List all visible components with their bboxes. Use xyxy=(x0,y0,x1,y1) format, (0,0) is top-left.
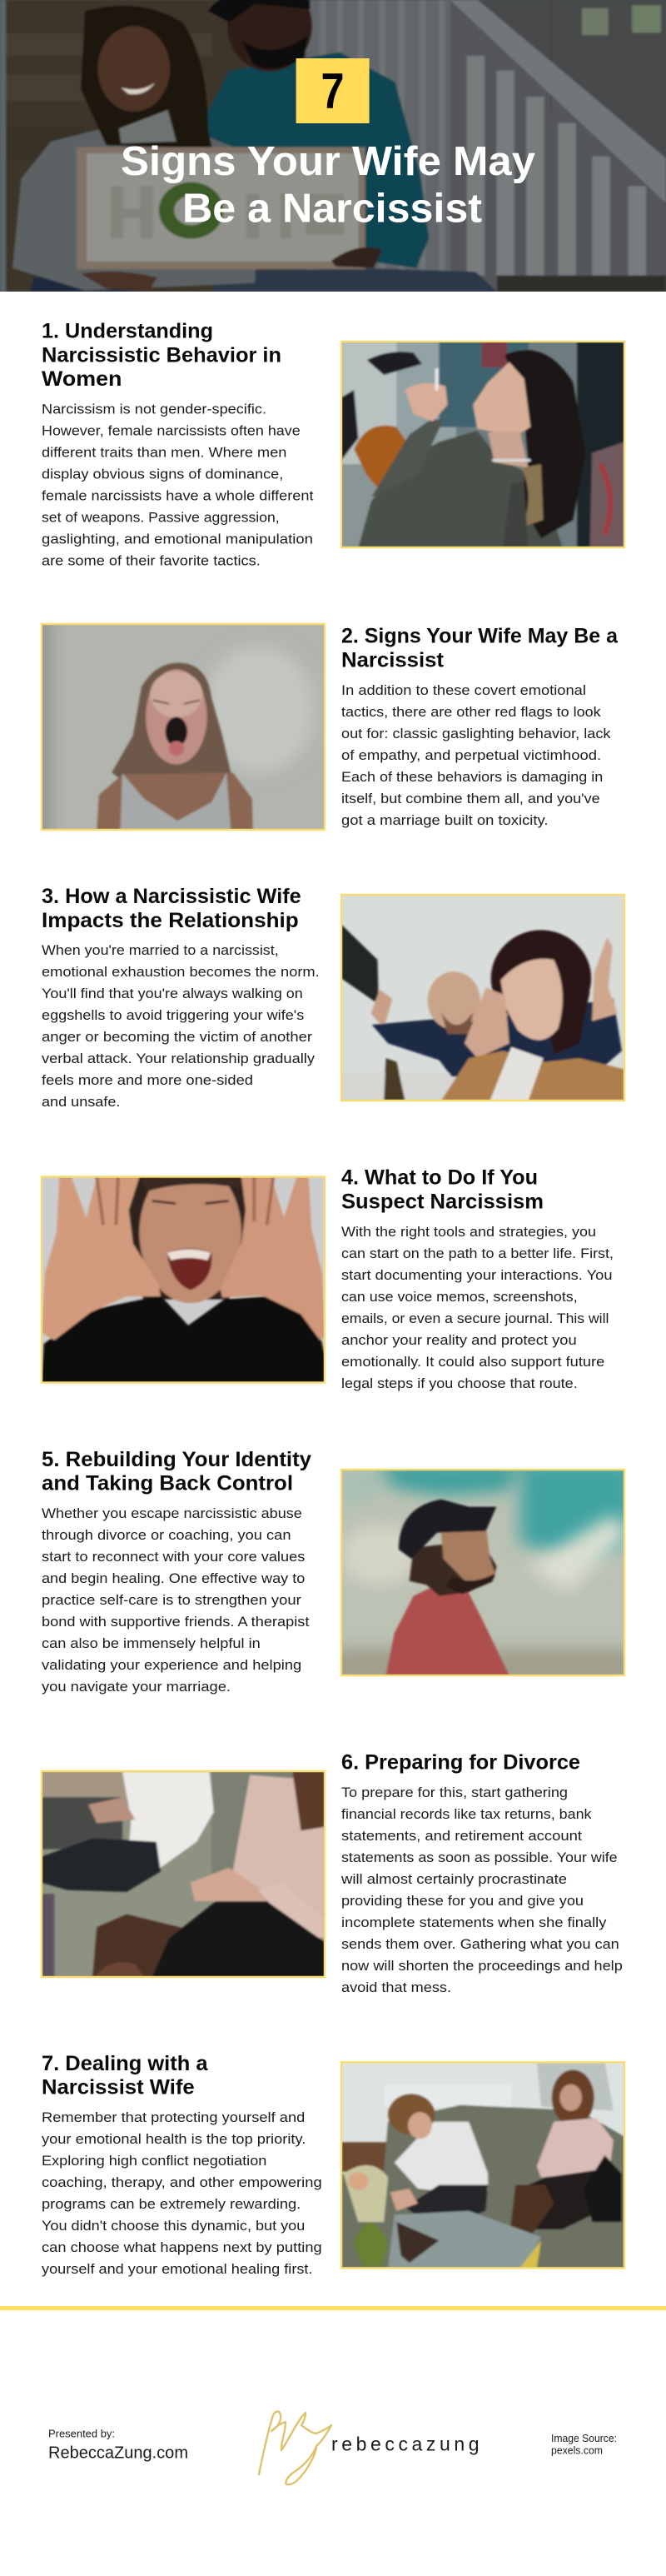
body text 7: can choose what happens next by putting xyxy=(42,2240,322,2255)
panel: section 6 xyxy=(42,1751,623,1995)
body text 4: With the right tools and strategies, you xyxy=(341,1225,596,1240)
heading 7: 7. Dealing with a xyxy=(42,2052,209,2075)
body text 2 xyxy=(341,683,611,828)
body text 5: validating your experience and helping xyxy=(42,1658,301,1673)
body text 2: tactics, there are other red flags to look xyxy=(341,705,602,720)
heading 5 xyxy=(42,1448,311,1495)
body text 6: statements, and retirement account xyxy=(341,1829,582,1844)
panel: section 4 xyxy=(42,1162,614,1391)
panel: section 2 xyxy=(25,609,619,847)
body text 7: yourself and your emotional healing first. xyxy=(42,2262,313,2277)
body text 7: coaching, therapy, and other empowering xyxy=(42,2175,322,2190)
body text 5: through divorce or coaching, you can xyxy=(42,1528,291,1543)
heading 5: and Taking Back Control xyxy=(42,1471,293,1495)
body text 4: legal steps if you choose that route. xyxy=(341,1376,578,1391)
body text 1: gaslighting, and emotional manipulation xyxy=(42,532,313,547)
heading 3: Impacts the Relationship xyxy=(42,909,299,932)
body text 7: programs can be extremely rewarding. xyxy=(42,2197,301,2212)
body text 3: When you're married to a narcissist, xyxy=(42,943,279,958)
body text 6: now will shorten the proceedings and help xyxy=(341,1959,623,1974)
body text 4: emails, or even a secure journal. This will xyxy=(341,1311,609,1326)
heading 1 xyxy=(42,319,281,391)
photo: woman screaming with hands by head xyxy=(42,1162,325,1383)
presented by xyxy=(48,2428,188,2463)
body text 2: of empathy, and perpetual victimhood. xyxy=(341,748,601,763)
body text 3: You'll find that you're always walking on xyxy=(42,986,303,1001)
sign xyxy=(77,147,365,269)
logo: rebeccazung signature: rebeccazung xyxy=(331,2434,480,2455)
yellow divider xyxy=(0,2306,666,2310)
body text 1: different traits than men. Where men xyxy=(42,445,286,460)
body text 2: itself, but combine them all, and you've xyxy=(341,791,600,806)
woman xyxy=(358,431,562,547)
body text 6: providing these for you and give you xyxy=(341,1894,584,1909)
photo: couple on a sofa with glass table xyxy=(341,2062,624,2268)
number badge xyxy=(296,58,370,123)
image source: pexels.com xyxy=(551,2445,603,2457)
body text 3: eggshells to avoid triggering your wife's xyxy=(42,1008,304,1023)
body text 3: feels more and more one-sided xyxy=(42,1073,253,1088)
body text 3: emotional exhaustion becomes the norm. xyxy=(42,965,320,980)
body text 5: start to reconnect with your core values xyxy=(42,1550,305,1565)
body text 6: statements as soon as possible. Your wife xyxy=(341,1850,618,1865)
jeans xyxy=(212,268,497,292)
logo: rebeccazung signature xyxy=(259,2411,480,2484)
body text 3 xyxy=(42,943,320,1110)
body text 1: set of weapons. Passive aggression, xyxy=(42,510,280,525)
body text 6: financial records like tax returns, bank xyxy=(341,1807,592,1822)
heading 2 xyxy=(341,624,619,671)
body text 2: out for: classic gaslighting behavior, lack xyxy=(341,726,611,741)
body text 6 xyxy=(340,1785,623,1995)
heading 1: Women xyxy=(42,367,122,391)
body text 5: and begin healing. One effective way to xyxy=(42,1571,305,1586)
title xyxy=(121,139,535,232)
heading 4: 4. What to Do If You xyxy=(341,1166,538,1189)
woman xyxy=(12,125,259,291)
body text 4 xyxy=(341,1225,614,1391)
body text 3: and unsafe. xyxy=(42,1095,120,1110)
heading 3: 3. How a Narcissistic Wife xyxy=(42,885,301,908)
body text 4: anchor your reality and protect you xyxy=(341,1333,577,1348)
title: Signs Your Wife May xyxy=(121,139,535,184)
body text 7: your emotional health is the top priority. xyxy=(42,2132,306,2147)
panel: section 3 xyxy=(42,885,624,1110)
photo: woman smoking against graffiti wall xyxy=(341,342,624,547)
body text 6: avoid that mess. xyxy=(341,1980,451,1995)
heading 5: 5. Rebuilding Your Identity xyxy=(42,1448,311,1471)
body text 6: will almost certainly procrastinate xyxy=(340,1872,567,1887)
number badge: 7 xyxy=(321,63,345,118)
panel: section 7 xyxy=(42,2052,624,2277)
body text 1 xyxy=(42,402,314,568)
heading 2: 2. Signs Your Wife May Be a xyxy=(341,624,619,647)
body text 2: got a marriage built on toxicity. xyxy=(341,813,548,828)
heading 2: Narcissist xyxy=(341,648,445,671)
heading 1: 1. Understanding xyxy=(42,319,213,342)
photo: couple's hands and knees on a sofa xyxy=(42,1771,325,1977)
photo: woman screaming on grey backdrop xyxy=(25,609,325,847)
body text 2: Each of these behaviors is damaging in xyxy=(341,770,603,785)
body text 4: can use voice memos, screenshots, xyxy=(341,1290,578,1305)
panel: section 1 xyxy=(42,319,624,568)
body text 5: you navigate your marriage. xyxy=(42,1680,231,1695)
body text 5: can also be immensely helpful in xyxy=(42,1636,261,1651)
body text 4: emotionally. It could also support future xyxy=(341,1355,604,1370)
footer xyxy=(48,2411,617,2484)
hero photo: couple on stairs holding a sign xyxy=(0,0,666,292)
body text 7: You didn't choose this dynamic, but you xyxy=(42,2219,305,2234)
title: Be a Narcissist xyxy=(182,187,482,232)
body text 5: practice self-care is to strengthen your xyxy=(42,1593,301,1608)
heading 7: Narcissist Wife xyxy=(42,2075,195,2099)
body text 1: female narcissists have a whole different xyxy=(42,488,314,503)
body text 5: bond with supportive friends. A therapist xyxy=(42,1615,310,1630)
body text 7: Exploring high conflict negotiation xyxy=(42,2154,266,2169)
body text 5 xyxy=(42,1506,310,1695)
body text 4: can start on the path to a better life. First, xyxy=(341,1246,614,1261)
body text 4: start documenting your interactions. You xyxy=(341,1268,613,1283)
hero banner xyxy=(0,0,666,292)
heading 7 xyxy=(42,2052,209,2099)
presented by: Presented by: xyxy=(48,2428,115,2440)
man xyxy=(204,52,429,268)
body text 1: Narcissism is not gender-specific. xyxy=(42,402,266,417)
panel: section 5 xyxy=(42,1448,639,1695)
body text 7 xyxy=(42,2110,322,2277)
heading 4: Suspect Narcissism xyxy=(341,1190,544,1213)
body text 5: Whether you escape narcissistic abuse xyxy=(42,1506,302,1521)
image source xyxy=(551,2433,617,2457)
body text 1: are some of their favorite tactics. xyxy=(42,553,261,568)
body text 2: In addition to these covert emotional xyxy=(341,683,586,698)
heading 4 xyxy=(341,1166,544,1213)
heading 6: 6. Preparing for Divorce xyxy=(341,1751,580,1775)
image source: Image Source: xyxy=(551,2433,617,2444)
body text 7: Remember that protecting yourself and xyxy=(42,2110,305,2125)
photo: man in cap looking up at sky xyxy=(329,1462,639,1685)
presented by: RebeccaZung.com xyxy=(48,2444,188,2463)
photo: man shouting behind worried woman xyxy=(341,895,624,1101)
heading 1: Narcissistic Behavior in xyxy=(42,343,281,367)
body text 1: However, female narcissists often have xyxy=(42,423,301,438)
body text 3: verbal attack. Your relationship gradually xyxy=(42,1051,316,1066)
body text 1: display obvious signs of dominance, xyxy=(42,467,283,482)
body text 6: incomplete statements when she finally xyxy=(341,1915,607,1930)
body text 3: anger or becoming the victim of another xyxy=(42,1030,313,1045)
body text 6: sends them over. Gathering what you can xyxy=(341,1937,619,1952)
heading 3 xyxy=(42,885,301,932)
body text 6: To prepare for this, start gathering xyxy=(341,1785,568,1800)
